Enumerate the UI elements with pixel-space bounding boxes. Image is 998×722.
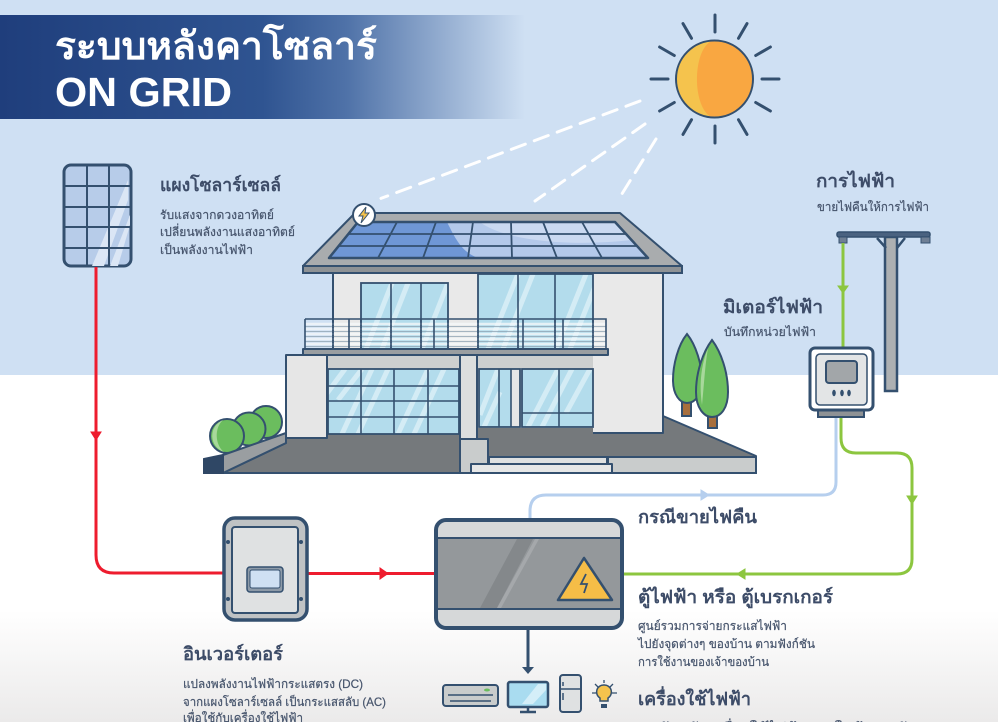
upper window left	[361, 283, 448, 349]
tree left	[673, 334, 702, 416]
label: solar panel: เป็นพลังงานไฟฟ้า	[160, 242, 253, 257]
sun rays dashed	[381, 101, 656, 201]
appliances	[443, 675, 617, 712]
red wire: inverter to breaker	[307, 568, 434, 579]
beam right	[478, 356, 593, 369]
solar panel icon	[64, 165, 131, 266]
left pillar	[286, 355, 327, 438]
label: electricity authority: การไฟฟ้า	[816, 170, 895, 191]
icon: monitor	[508, 682, 548, 712]
electricity meter	[810, 348, 873, 417]
label: inverter: แปลงพลังงานไฟฟ้ากระแสตรง (DC)	[183, 677, 363, 691]
icon: light bulb	[592, 680, 617, 708]
lower step	[471, 464, 612, 473]
label: electricity authority	[816, 170, 929, 214]
label: inverter: อินเวอร์เตอร์	[183, 643, 283, 664]
label: breaker cabinet: ตู้ไฟฟ้า หรือ ตู้เบรกเกอร์	[638, 586, 833, 609]
arrow: breaker to appliances	[522, 629, 534, 674]
label: inverter	[183, 643, 386, 722]
label: appliances	[638, 686, 980, 722]
title banner	[0, 15, 525, 119]
label: solar panel: เปลี่ยนพลังงานแสงอาทิตย์	[160, 223, 295, 239]
roof	[303, 213, 682, 273]
green wire: pole to meter	[838, 243, 848, 348]
label: sell back: กรณีขายไฟคืน	[638, 506, 758, 527]
wall base and entry block	[460, 439, 488, 473]
garage window	[322, 369, 459, 434]
background: sky	[0, 0, 998, 375]
icon: sun	[651, 15, 779, 143]
label: breaker cabinet	[637, 586, 833, 669]
ground under entrance	[477, 428, 593, 458]
walls	[333, 272, 663, 433]
side window	[522, 369, 593, 427]
label: inverter: จากแผงโซลาร์เซลล์ เป็นกระแสสลับ (AC)	[183, 694, 386, 709]
driveway kerb right	[608, 457, 756, 473]
icon: refrigerator	[560, 675, 581, 712]
label: electricity authority: ขายไฟคืนให้การไฟฟ้า	[817, 200, 929, 214]
beam left	[328, 356, 460, 369]
title: ON GRID: ON GRID	[55, 69, 232, 115]
electric pole	[837, 232, 930, 391]
label: breaker cabinet: การใช้งานของเจ้าของบ้าน	[638, 655, 769, 669]
upper step	[489, 457, 607, 464]
blue wire: breaker to meter	[530, 417, 836, 519]
icon: warning triangle	[558, 558, 612, 600]
upper window right	[478, 274, 600, 349]
balcony railing	[305, 319, 606, 348]
tree right	[696, 340, 728, 428]
ground	[223, 416, 756, 473]
label: breaker cabinet: ไปยังจุดต่างๆ ของบ้าน ตามฟังก์ชัน	[637, 637, 815, 652]
label: appliances: เครื่องใช้ไฟฟ้า	[638, 686, 751, 709]
icon: air conditioner	[443, 685, 498, 706]
label: solar panel	[160, 174, 295, 257]
inverter	[224, 518, 307, 620]
icon: lightning badge	[353, 204, 375, 226]
breaker cabinet	[436, 520, 622, 628]
label: meter: บันทึกหน่วยไฟฟ้า	[724, 325, 816, 339]
planter	[204, 406, 286, 473]
front door glass	[479, 369, 520, 427]
label: solar panel: รับแสงจากดวงอาทิตย์	[160, 208, 274, 222]
title: Thai line: ระบบหลังคาโซลาร์	[55, 23, 378, 68]
red wire: panel to inverter	[91, 267, 223, 573]
label: breaker cabinet: ศูนย์รวมการจ่ายกระแสไฟฟ้า	[638, 619, 787, 634]
label: meter	[723, 296, 823, 339]
centre pillar	[460, 355, 477, 439]
house	[204, 204, 756, 473]
green wire: meter to breaker	[623, 417, 917, 579]
label: solar panel: แผงโซลาร์เซลล์	[160, 174, 281, 195]
label: meter: มิเตอร์ไฟฟ้า	[723, 296, 823, 317]
balcony slab	[303, 349, 608, 355]
background: ground gradient	[0, 610, 998, 722]
